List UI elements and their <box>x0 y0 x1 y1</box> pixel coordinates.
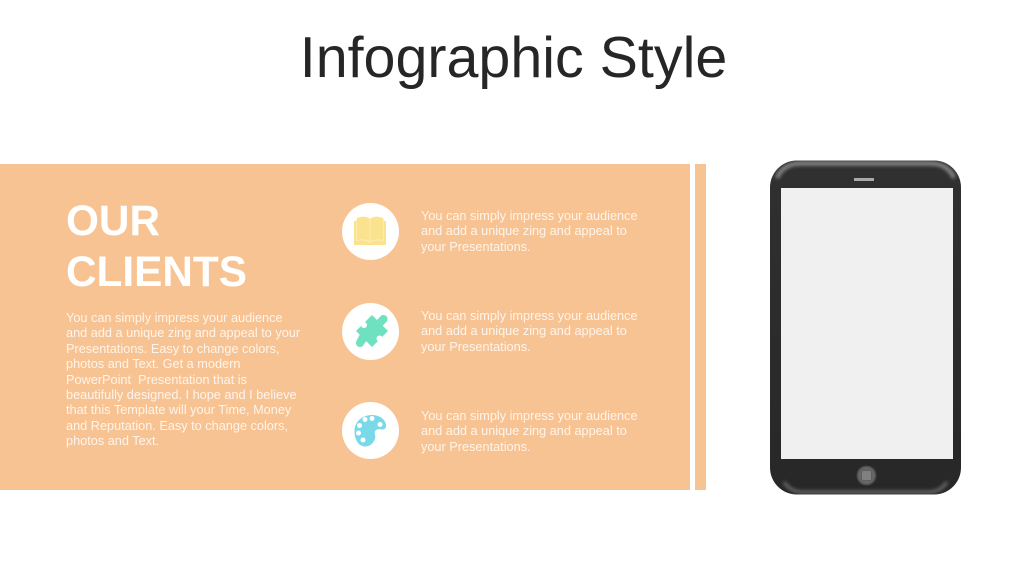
text: item 2 <box>421 308 638 354</box>
text: item 1: and add a unique zing and appeal to <box>421 223 627 238</box>
text: item 1: You can simply impress your audience <box>421 208 638 223</box>
heading: OUR <box>66 197 160 244</box>
body text: and add a unique zing and appeal to your <box>66 325 300 340</box>
icon: puzzle piece <box>342 303 399 360</box>
heading: CLIENTS <box>66 248 247 295</box>
body text: that this Template will your Time, Money <box>66 402 291 417</box>
body text: PowerPoint Presentation that is <box>66 372 247 387</box>
text: item 3: and add a unique zing and appeal to <box>421 423 627 438</box>
text: item 2: your Presentations. <box>421 339 531 354</box>
text: item 1 <box>421 208 638 254</box>
panel: our clients <box>0 164 690 490</box>
text: item 2: and add a unique zing and appeal to <box>421 323 627 338</box>
body text: and Reputation. Easy to change colors, <box>66 418 288 433</box>
text: item 3: your Presentations. <box>421 439 531 454</box>
text: item 2: You can simply impress your audience <box>421 308 638 323</box>
body text: Presentations. Easy to change colors, <box>66 341 280 356</box>
text: item 3: You can simply impress your audience <box>421 408 638 423</box>
icon: tablet device <box>770 160 961 494</box>
text: item 1: your Presentations. <box>421 239 531 254</box>
accent bar <box>695 164 706 490</box>
body text: beautifully designed. I hope and I believe <box>66 387 297 402</box>
icon: book <box>342 203 399 260</box>
icon: palette <box>342 402 399 459</box>
title: Infographic Style <box>300 26 727 90</box>
text: item 3 <box>421 408 638 454</box>
body text <box>66 310 300 448</box>
heading <box>66 197 247 295</box>
body text: You can simply impress your audience <box>66 310 283 325</box>
body text: photos and Text. <box>66 433 159 448</box>
body text: photos and Text. Get a modern <box>66 356 240 371</box>
